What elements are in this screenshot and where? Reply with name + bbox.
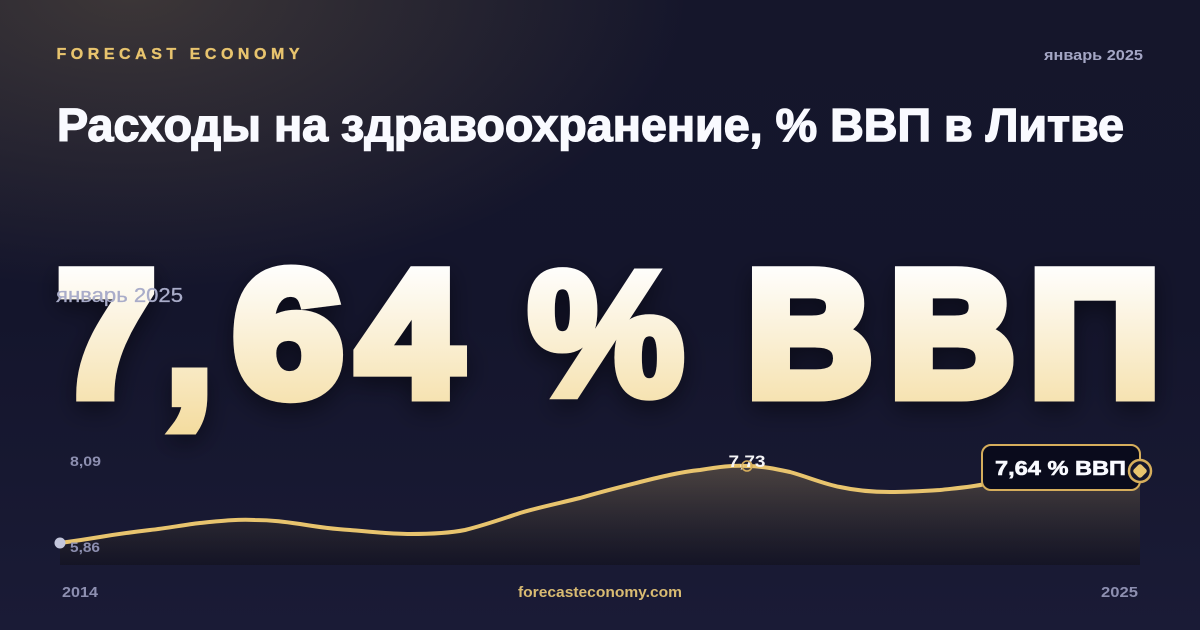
latest value callout: 7,64 % ВВП (995, 458, 1126, 480)
hero value: 6 (233, 234, 343, 433)
start point marker (54, 538, 66, 548)
trend line (60, 466, 1140, 543)
title: Расходы на здравоохранение, % ВВП в Литве (57, 99, 1124, 151)
hero value: 7 (58, 235, 155, 433)
end year: 2025 (1101, 584, 1138, 601)
start year: 2014 (62, 584, 99, 601)
area under curve (60, 466, 1140, 565)
hero value: , (166, 241, 212, 439)
hero value: 4 (358, 234, 461, 433)
hero value: В (747, 235, 873, 433)
date top right: январь 2025 (1044, 47, 1143, 64)
latest point marker (1129, 460, 1151, 482)
overlaid date label: январь 2025 (56, 285, 183, 307)
brand label: FORECAST ECONOMY (56, 46, 300, 63)
hero value: % (528, 235, 684, 433)
peak value label: 7,73 (728, 452, 766, 471)
latest value callout (982, 445, 1140, 490)
peak marker (742, 461, 752, 471)
hero value (58, 234, 1160, 439)
chart (54, 445, 1151, 565)
axis min label: 5,86 (70, 540, 101, 555)
hero value: В (890, 235, 1015, 433)
hero value: П (1029, 235, 1160, 433)
axis max label: 8,09 (70, 454, 101, 469)
source url: forecasteconomy.com (518, 584, 682, 601)
